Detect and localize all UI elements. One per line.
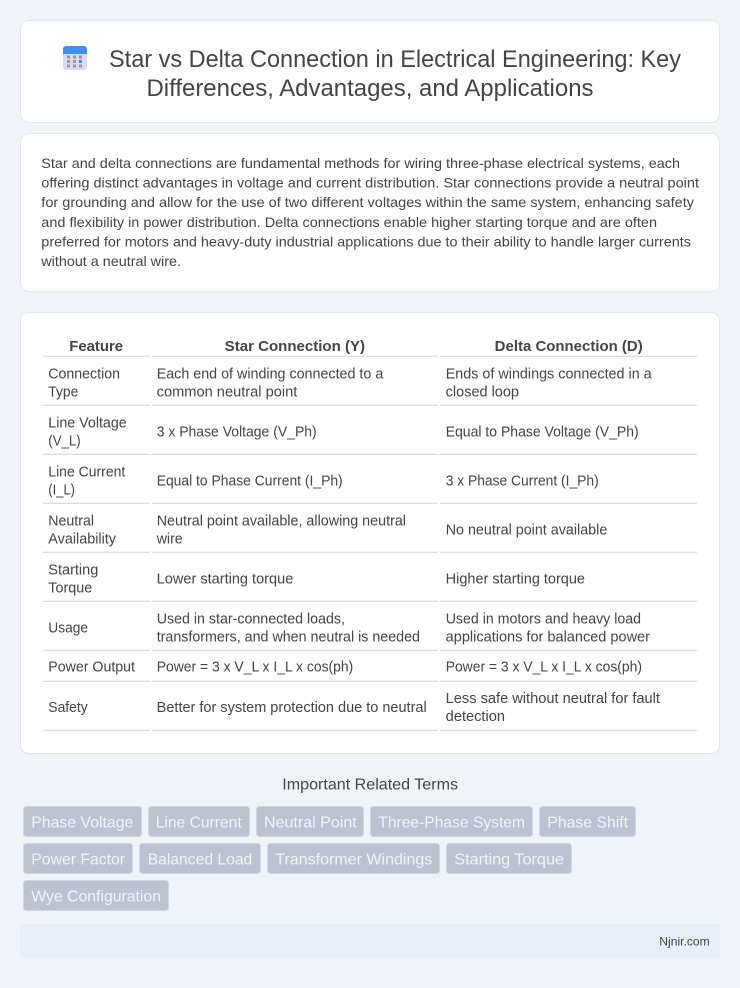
row: safety: detection <box>446 709 505 725</box>
row: usage: applications for balanced power <box>446 629 650 645</box>
row: power output: Power = 3 x V_L x I_L x cos(ph) <box>446 660 642 676</box>
row: line voltage: (V_L) <box>48 433 81 449</box>
row: line voltage: 3 x Phase Voltage (V_Ph) <box>157 424 317 440</box>
row: neutral availability: Neutral <box>48 513 94 529</box>
row: connection type: common neutral point <box>157 384 297 400</box>
row: line current: 3 x Phase Current (I_Ph) <box>446 473 599 489</box>
row: safety <box>48 691 660 725</box>
row: usage: transformers, and when neutral is needed <box>157 629 420 645</box>
row: starting torque <box>48 562 585 596</box>
chip: neutral point: Neutral Point <box>264 814 357 831</box>
chip: phase shift <box>540 806 636 836</box>
chip: transformer windings <box>268 844 440 874</box>
chip: balanced load <box>140 844 260 874</box>
panel: related term chips <box>24 806 636 910</box>
row: neutral availability: No neutral point available <box>446 522 607 538</box>
title <box>109 46 681 102</box>
chip: balanced load: Balanced Load <box>148 851 252 868</box>
chip: phase voltage: Phase Voltage <box>31 814 133 831</box>
text block: introduction paragraph: preferred for motors and heavy-duty industrial applications due to their ability to handle larger currents <box>41 233 691 249</box>
chip: phase voltage <box>24 806 142 836</box>
chip: three-phase system: Three-Phase System <box>378 814 525 831</box>
row: connection type <box>48 366 652 400</box>
chip: starting torque: Starting Torque <box>454 851 564 868</box>
row: connection type: Each end of winding connected to a <box>157 366 383 382</box>
panel: header <box>20 20 720 122</box>
chip: phase shift: Phase Shift <box>547 814 629 831</box>
footer <box>20 924 720 958</box>
chip: line current <box>148 806 250 836</box>
text block: introduction paragraph: without a neutral wire. <box>40 253 181 269</box>
chip: three-phase system <box>370 806 532 836</box>
title: Differences, Advantages, and Applications <box>146 75 594 102</box>
row: connection type: closed loop <box>446 384 519 400</box>
chip: wye configuration <box>24 880 168 910</box>
row: connection type: Connection <box>48 366 120 382</box>
row: line voltage: Equal to Phase Voltage (V_Ph) <box>446 424 639 440</box>
row: line voltage: Line Voltage <box>48 415 127 431</box>
row: power output: Power = 3 x V_L x I_L x cos(ph) <box>157 660 353 676</box>
icon: calendar <box>63 46 87 70</box>
chip: wye configuration: Wye Configuration <box>31 888 161 905</box>
text block: introduction paragraph: and flexibility in power distribution. Delta connections enable higher starting torque and are often <box>41 214 657 230</box>
row: starting torque: Starting <box>48 562 98 578</box>
table header row: Feature <box>69 339 123 355</box>
row: line current: Line Current <box>48 464 125 480</box>
row: neutral availability: Availability <box>48 531 117 547</box>
chip: power factor: Power Factor <box>31 851 126 868</box>
table header row: Delta Connection (D) <box>495 339 643 355</box>
row: power output: Power Output <box>48 660 135 676</box>
text block: introduction paragraph: offering distinct advantages in voltage and current distribution. Star connections provide a neutral point <box>41 175 699 191</box>
row: line current: (I_L) <box>48 482 75 498</box>
row: starting torque: Lower starting torque <box>157 571 293 587</box>
table header row <box>69 339 643 355</box>
chip: line current: Line Current <box>156 814 242 831</box>
chip: transformer windings: Transformer Windings <box>275 851 432 868</box>
panel: comparison table <box>20 312 720 754</box>
row: line current: Equal to Phase Current (I_Ph) <box>157 473 343 489</box>
chip: neutral point <box>256 806 364 836</box>
row: line voltage <box>48 415 639 449</box>
row: neutral availability <box>48 513 607 547</box>
row: usage: Usage <box>48 620 88 636</box>
footer: Njnir.com <box>659 935 710 949</box>
row: starting torque: Torque <box>48 580 92 596</box>
row: usage: Used in motors and heavy load <box>446 611 641 627</box>
row: neutral availability: wire <box>156 531 183 547</box>
row: usage <box>48 611 650 645</box>
row: safety: Less safe without neutral for fault <box>446 691 660 707</box>
row: safety: Safety <box>48 700 88 716</box>
row: neutral availability: Neutral point available, allowing neutral <box>157 513 406 529</box>
chip: power factor <box>24 844 132 874</box>
title: Star vs Delta Connection in Electrical Engineering: Key <box>109 46 681 73</box>
row: connection type: Type <box>48 384 78 400</box>
table header row: Star Connection (Y) <box>225 339 365 355</box>
row: starting torque: Higher starting torque <box>446 571 585 587</box>
text block: introduction paragraph: for grounding and allow for the use of two different voltages within the same system, enhancing safety <box>41 194 694 210</box>
row: usage: Used in star-connected loads, <box>157 611 345 627</box>
row: connection type: Ends of windings connected in a <box>446 366 652 382</box>
row: safety: Better for system protection due to neutral <box>157 700 427 716</box>
heading: important related terms: Important Related Terms <box>282 776 458 793</box>
row: line current <box>48 464 599 498</box>
chip: starting torque <box>446 844 572 874</box>
text block: introduction paragraph <box>40 155 699 269</box>
row: power output <box>48 660 642 676</box>
text block: introduction paragraph: Star and delta connections are fundamental methods for wiring three-phase electrical systems, each <box>41 155 680 171</box>
panel: introduction <box>20 134 720 292</box>
